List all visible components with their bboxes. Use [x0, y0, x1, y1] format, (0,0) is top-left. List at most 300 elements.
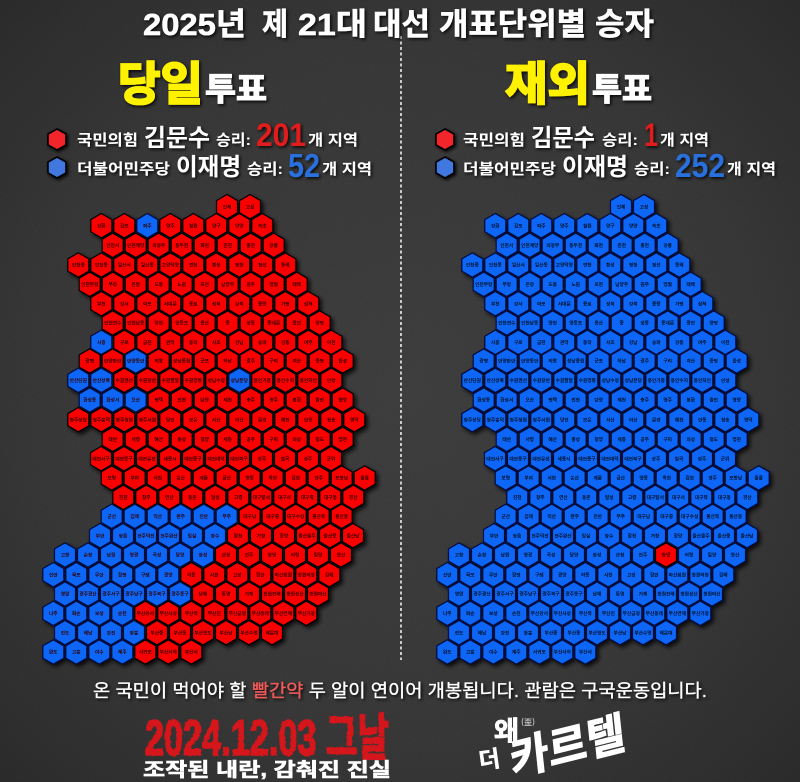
hex map: 당일투표: 칠곡: [281, 455, 290, 462]
hex map: 재외투표: 고령: [628, 494, 637, 500]
hex map: 당일투표: 해운대: [266, 629, 278, 636]
hex map: 당일투표: 연산: [165, 494, 174, 500]
hex map: 재외투표: 완주: [570, 513, 580, 520]
hex map: 재외투표: 동해: [675, 262, 684, 269]
hex map: 당일투표: 장성: [199, 552, 207, 558]
hex map: 당일투표: 함평: [118, 571, 127, 577]
hex map: 당일투표: 양양: [235, 222, 244, 228]
hex map: 재외투표: 포항남: [729, 475, 743, 481]
hex map: 재외투표: 양주: [560, 222, 569, 229]
hex map: 당일투표: 강북: [235, 300, 244, 307]
hex map: 당일투표: 대구동: [324, 494, 337, 501]
legend row: 김문수 201: 201: [256, 117, 306, 153]
hex map: 당일투표: 세종시: [164, 455, 176, 462]
hex map: 당일투표: 광주동구: [171, 591, 189, 598]
hex map: 재외투표: 영동: [639, 475, 649, 481]
hex map: 재외투표: 봉화: [686, 397, 696, 404]
hex map: 당일투표: 도봉: [154, 282, 164, 287]
hex map: 당일투표: 완주: [176, 513, 186, 520]
hex map: 재외투표: 마산회원: [669, 571, 686, 578]
hex map: 재외투표: 청도: [709, 436, 719, 442]
hex map: 재외투표: 평택: [548, 397, 557, 404]
hex map: 재외투표: 공주: [640, 437, 650, 443]
hex map: 당일투표: 부산중: [151, 629, 164, 636]
hex map: 재외투표: 고성: [627, 571, 636, 577]
hex map: 당일투표: 울산남: [347, 532, 360, 539]
hex map: 재외투표: 장흥: [524, 629, 533, 636]
hex map: 재외투표: 김해: [719, 571, 728, 578]
hex map: 당일투표: 구미: [269, 436, 278, 443]
hex map: 재외투표: 부산금정: [623, 610, 640, 617]
hex map: 재외투표: 동대문: [661, 320, 675, 327]
hex map: 당일투표: 울진: [315, 397, 324, 404]
hex map: 당일투표: 은평: [131, 281, 140, 287]
hex map: 재외투표: 중랑: [652, 300, 661, 306]
legend row: 이재명 252: 252: [675, 147, 725, 184]
hex map: 당일투표: 고흥: [72, 649, 81, 656]
hex map: 당일투표: 임실: [188, 532, 196, 538]
hex map: 재외투표: 양산: [731, 552, 740, 558]
hex map: 재외투표: 부평: [502, 281, 511, 288]
hex map: 재외투표: 부산동: [568, 629, 581, 636]
hex map: 당일투표: 홍천: [246, 242, 255, 249]
hex map: 당일투표: 대구수성: [287, 513, 304, 520]
hex map: 당일투표: 중랑: [258, 300, 267, 306]
hex map: 재외투표: 부산남: [614, 629, 627, 636]
hex map: 당일투표: 대전북구: [230, 455, 248, 462]
hex map: 재외투표: 인천연수: [498, 320, 516, 327]
hex map: 재외투표: 부산사하: [554, 649, 572, 656]
hex map: 당일투표: 수원팔달: [162, 377, 180, 384]
hex map: 당일투표: 동촌: [188, 494, 197, 500]
hex map: 재외투표: 김천: [685, 475, 694, 481]
icon: blue hexagon: [436, 157, 454, 178]
hex map: 재외투표: 수원영통: [579, 377, 597, 384]
hex map: 재외투표: 음성: [732, 358, 741, 364]
hex map: 당일투표: 보령: [107, 475, 116, 481]
hex map: 재외투표: 창녕: [662, 552, 670, 558]
hex map: 재외투표: 가평: [675, 300, 684, 307]
title: 승자: [595, 7, 654, 42]
hex map: 당일투표: 노원: [177, 281, 186, 287]
legend row: 김문수 1: 승리:: [602, 132, 638, 149]
hex map: 재외투표: 창원마산: [703, 591, 721, 598]
hex map: 당일투표: 안양동안: [127, 358, 145, 364]
hex map: 재외투표: 의정부: [546, 242, 560, 249]
hex map: 재외투표: 강릉: [663, 242, 673, 249]
hex map: 당일투표: 금산: [222, 475, 232, 481]
hex map: 재외투표: 함평: [512, 571, 521, 577]
hex map: 재외투표: 양구: [606, 222, 615, 229]
hex map: 재외투표: 장수: [605, 532, 614, 539]
legend row: 김문수 201: 국민의힘: [77, 132, 138, 149]
hex map: 재외투표: 진천: [513, 494, 522, 500]
hex map: 재외투표: 울산울주: [692, 532, 710, 539]
hex map: 당일투표: 논산: [176, 475, 186, 481]
title: 21대: [298, 7, 367, 42]
hex map: 당일투표: 계룡: [199, 475, 209, 482]
film subtitle: 조작된 내란, 감춰진 진실: [143, 759, 391, 781]
hex map: 당일투표: 고성: [233, 571, 242, 577]
legend row: 김문수 201: [77, 117, 358, 153]
legend row: 이재명 52: 더불어민주당: [77, 161, 170, 178]
hex map: 당일투표: 신안: [49, 571, 58, 577]
hex map: 재외투표: 청주서원: [533, 416, 550, 423]
hex map: 당일투표: 진안: [199, 513, 209, 519]
hex map: 당일투표: 송파: [258, 339, 267, 346]
hex map: 재외투표: 안산상록: [487, 377, 505, 384]
hex map: 재외투표: 산청: [616, 552, 624, 558]
hex map: 재외투표: 안성: [721, 377, 730, 383]
title: 2025년: [143, 7, 246, 42]
hex map: 재외투표: 강동: [675, 339, 684, 345]
hex map: 당일투표: 정읍: [119, 532, 128, 538]
hex map: 재외투표: 청주상당: [464, 416, 482, 423]
hex map: 당일투표: 성남중원: [173, 358, 190, 364]
hex map: 재외투표: 상주: [652, 455, 661, 462]
hex map: 재외투표: 화성서: [500, 397, 513, 404]
hex map: 당일투표: 고양덕양: [162, 262, 180, 269]
hex map: 당일투표: 양주: [166, 222, 175, 229]
hex map: 재외투표: 예산: [548, 436, 558, 443]
hex map: 재외투표: 성북: [606, 300, 615, 307]
hex map: 재외투표: 광양: [558, 571, 567, 577]
hex map: 당일투표: 공주: [246, 437, 256, 443]
hex map: 당일투표: 수원권선: [116, 377, 133, 384]
hex map: 재외투표: 영암: [455, 591, 464, 597]
film logo: 왜 더 카르텔: 더: [477, 745, 502, 774]
hex map: 재외투표: 부산동래: [646, 610, 663, 617]
hex map: 당일투표: 철원: [189, 222, 198, 228]
hex map: 당일투표: 서귀포: [139, 649, 152, 656]
hex map: 재외투표: 남해: [593, 591, 601, 598]
hex map: 당일투표: 광주북구: [148, 591, 166, 598]
hex map: 당일투표: 아산: [235, 416, 244, 423]
hex map: 재외투표: 부안: [490, 532, 499, 539]
hex map: 당일투표: 영덕: [350, 416, 359, 423]
hex map: 당일투표: 동두천: [175, 242, 188, 249]
hex map: 당일투표: 통영: [222, 591, 230, 597]
heading: 당일투표: [118, 58, 267, 110]
hex map: 재외투표: 보령: [501, 475, 510, 481]
hex map: 당일투표: 광주광산: [79, 591, 97, 598]
hex map: 당일투표: 성남수정: [208, 377, 225, 384]
hex map: 재외투표: 태안: [502, 436, 512, 443]
hex map: 재외투표: 보은: [583, 417, 592, 422]
hex map: 재외투표: 금천: [537, 339, 546, 345]
hex map: 재외투표: 거제: [639, 591, 647, 598]
hex map: 당일투표: 청송: [327, 416, 336, 422]
hex map: 재외투표: 강북: [629, 300, 638, 307]
title: 제: [262, 7, 288, 42]
icon: red hexagon: [436, 129, 454, 150]
hex map: 당일투표: 시흥: [97, 339, 106, 346]
hex map: 재외투표: 홍성: [571, 436, 580, 443]
hex map: 당일투표: 청주청원: [116, 416, 133, 423]
hex map: 재외투표: 삼척: [698, 300, 707, 307]
hex map: 당일투표: 산청: [222, 552, 230, 558]
hex map: 재외투표: 대구중: [660, 513, 674, 520]
hex map: 재외투표: 인제: [617, 203, 625, 210]
hex map: 재외투표: 곡성: [547, 552, 555, 559]
hex map: 당일투표: 부산북: [185, 610, 198, 617]
film logo: 왜 더 카르텔: (歪): [521, 717, 535, 728]
hex map: 당일투표: 영동: [245, 475, 255, 481]
hex map: 당일투표: 괴산: [292, 358, 302, 365]
hex map: 재외투표: 이천: [721, 339, 730, 346]
hex map: 당일투표: 인천중: [72, 262, 85, 268]
hex map: 재외투표: 의성: [686, 436, 695, 443]
hex map: 당일투표: 청주서원: [139, 416, 156, 423]
hex map: 당일투표: 진천: [177, 397, 186, 403]
hex map: 당일투표: 충주: [246, 397, 256, 404]
hex map: 당일투표: 태백: [292, 281, 301, 288]
hex map: 당일투표: 문경: [258, 416, 267, 422]
legend row: 김문수 201: 개 지역: [308, 132, 358, 149]
hex map: 당일투표: 진천: [119, 494, 128, 500]
hex map: 재외투표: 칠곡: [675, 455, 684, 462]
hex map: 당일투표: 이천: [327, 339, 336, 346]
hex map: 재외투표: 수원권선: [510, 377, 527, 384]
hex map: 재외투표: 대구북: [695, 494, 708, 501]
heading: 재외투표: 투표: [592, 71, 652, 107]
hex map: 당일투표: 부산기장: [298, 610, 316, 617]
hex map: 당일투표: 영암: [61, 591, 70, 597]
hex map: 재외투표: 부산북: [579, 610, 592, 617]
hex map: 재외투표: 제주: [512, 649, 521, 656]
hex map: 당일투표: 경주: [314, 475, 324, 482]
hex map: 당일투표: 고창: [61, 552, 70, 558]
hex map: 재외투표: 신안: [443, 571, 452, 577]
hex map: 당일투표: 안산상록: [93, 377, 111, 384]
hex map: 당일투표: 대구중: [266, 513, 280, 520]
hex map: 당일투표: 남양주: [221, 281, 235, 288]
hex map: 재외투표: 진천: [571, 397, 580, 403]
hex map: 당일투표: 인천연수: [104, 320, 122, 327]
hex map: 당일투표: 대전중구: [184, 455, 202, 462]
hex map: 재외투표: 남양주: [615, 281, 629, 288]
legend row: 이재명 52: 개 지역: [322, 161, 372, 178]
hex map: 당일투표: 남해: [199, 591, 207, 598]
hex map: 당일투표: 의령: [291, 552, 299, 559]
hex map: 재외투표: 용인수지: [671, 377, 688, 384]
hex map: 당일투표: 춘천: [223, 242, 232, 248]
hex map: 재외투표: 서귀포: [533, 649, 546, 656]
hex map: 당일투표: [43, 194, 375, 664]
hex map: 당일투표: 양구: [212, 222, 221, 229]
hex map: 당일투표: 영양: [338, 397, 348, 403]
hex map: 당일투표: 강릉: [269, 242, 279, 249]
hex map: 당일투표: 세종: [223, 436, 233, 443]
hex map: 재외투표: 파주: [537, 222, 546, 229]
hex map: 당일투표: 가평: [281, 300, 290, 307]
hex map: 재외투표: 마포: [537, 300, 546, 307]
legend row: 김문수 1: 개 지역: [660, 132, 709, 149]
hex map: 당일투표: 화천: [200, 242, 209, 249]
hex map: 당일투표: 대구북: [301, 494, 314, 501]
legend row: 이재명 52: 52: [288, 147, 320, 184]
hex map: 재외투표: 충주: [640, 397, 650, 404]
hex map: 재외투표: 여수: [489, 649, 498, 656]
legend row: 김문수 201: 김문수: [144, 125, 210, 152]
hex map: 재외투표: 울산동: [729, 513, 743, 520]
hex map: 당일투표: 창원마산: [309, 591, 327, 598]
hex map: 재외투표: 울릉: [754, 475, 764, 482]
hex map: 당일투표: 양산: [337, 552, 346, 558]
hex map: 당일투표: 수원영통: [185, 377, 203, 384]
hex map: 재외투표: 성남분당: [625, 377, 643, 383]
hex map: 재외투표: 강화: [491, 222, 500, 229]
hex map: 당일투표: 서대문: [164, 300, 177, 307]
hex map: 당일투표: 사천: [210, 571, 219, 578]
hex map: 당일투표: 의왕: [154, 358, 164, 365]
hex map: 당일투표: 수원장안: [139, 377, 157, 384]
hex map: 재외투표: 수원팔달: [556, 377, 574, 384]
hex map: 당일투표: 강남: [235, 339, 244, 345]
hex map: 당일투표: 오산: [131, 397, 141, 403]
hex map: 재외투표: 인천중: [466, 262, 479, 268]
hex map: 재외투표: 안양만안: [498, 358, 516, 364]
hex map: 당일투표: 제천: [223, 397, 232, 404]
legend row: 이재명 52: 이재명: [176, 154, 241, 181]
hex map: 당일투표: 횡성: [212, 262, 221, 268]
hex map: 재외투표: 고성: [640, 203, 648, 209]
hex map: 당일투표: 동작: [189, 339, 198, 346]
hex map: 재외투표: 울산중: [718, 532, 731, 539]
hex map: 재외투표: 고창: [455, 552, 464, 558]
hex map: 당일투표: 대전유성: [138, 455, 156, 462]
hex map: 재외투표: 구미: [663, 436, 672, 443]
hex map: 재외투표: 고양덕양: [556, 262, 574, 269]
legend row: 이재명 52: 승리:: [247, 161, 283, 178]
hex map: 재외투표: 함양: [674, 532, 683, 538]
hex map: 재외투표: 하동: [581, 571, 590, 578]
hex map: 재외투표: 구례: [535, 571, 544, 578]
hex map: 당일투표: 대전동구: [115, 455, 133, 462]
hex map: 재외투표: 장성: [593, 552, 601, 558]
hex map: 재외투표: 경주: [708, 475, 718, 482]
hex map: 당일투표: 거창: [257, 532, 266, 539]
hex map: 당일투표: 화성서: [106, 397, 119, 404]
hex map: 재외투표: 창원성산: [680, 591, 698, 597]
hex map: 당일투표: 보은: [189, 417, 198, 422]
hex map: 당일투표: 광명: [85, 358, 94, 364]
hex map: 당일투표: 영월: [269, 281, 278, 288]
hex map: 재외투표: 무주: [616, 514, 626, 520]
hex map: 재외투표: 영등포: [569, 320, 583, 326]
hex map: 재외투표: 남원: [501, 552, 509, 558]
hex map: 재외투표: 부산영도: [588, 629, 606, 636]
hex map: 재외투표: 함안: [650, 571, 659, 577]
hex map: 재외투표: 구리: [663, 358, 672, 365]
hex map: 재외투표: 완도: [443, 649, 452, 655]
hex map: 당일투표: 인천부평: [81, 281, 98, 288]
hex map: 재외투표: 정선: [652, 262, 661, 268]
hex map: 당일투표: 밀양: [314, 552, 323, 558]
hex map: 당일투표: 강서: [120, 300, 129, 307]
hex map: 당일투표: 평택: [154, 397, 163, 404]
hex map: 당일투표: 서초: [212, 339, 221, 346]
hex map: 재외투표: 세종: [617, 436, 627, 443]
legend row: 이재명 252: 더불어민주당: [463, 161, 556, 178]
hex map: 재외투표: 광진: [686, 320, 695, 326]
hex map: 당일투표: 안산단원: [70, 377, 87, 383]
hex map: 재외투표: 연산: [559, 494, 568, 500]
hex map: 재외투표: 김제: [524, 513, 533, 520]
legend row: 이재명 252: 승리:: [634, 161, 670, 178]
hex map: 재외투표: 부산서: [579, 649, 592, 656]
legend: left panel: [48, 117, 372, 184]
hex map: 당일투표: 부산동: [174, 629, 187, 636]
hex map: 재외투표: 성주: [698, 455, 707, 462]
hex map: 재외투표: 광주: [640, 358, 650, 365]
hex map: 당일투표: 무안: [95, 571, 104, 578]
hex map: 재외투표: 서초: [606, 339, 615, 346]
hex map: 재외투표: 양천: [548, 320, 557, 326]
hex map: 당일투표: 장흥: [130, 629, 139, 636]
hex map: 재외투표: 성동: [640, 320, 650, 326]
hex map: 재외투표: 성남중원: [567, 358, 584, 364]
hex map: 재외투표: 오산: [525, 397, 535, 403]
hex map: 당일투표: 부산남: [220, 629, 233, 636]
hex map: 재외투표: 원주: [640, 281, 650, 288]
hex map: 당일투표: 안성: [327, 377, 336, 383]
hex map: 당일투표: 인제: [223, 203, 231, 210]
hex map: 당일투표: 강화: [97, 222, 106, 229]
hex map: 당일투표: 청도: [315, 436, 325, 442]
hex map: 재외투표: 인천남동: [521, 320, 539, 326]
hex map: 당일투표: 부산수영: [240, 629, 258, 636]
hex map: 재외투표: 영천: [732, 436, 741, 442]
hex map: 재외투표: 양평: [709, 320, 718, 326]
hex map: 재외투표: 화성동: [477, 397, 491, 404]
hex map: 재외투표: 대전대덕: [601, 455, 619, 462]
legend row: 김문수 201: 승리:: [216, 132, 251, 149]
hex map: 당일투표: 구례: [141, 571, 150, 578]
hex map: 재외투표: 청송: [721, 416, 730, 422]
hex map: 재외투표: 영광: [524, 552, 533, 558]
hex map: 재외투표: 군포: [594, 359, 604, 364]
hex map: 당일투표: 고령: [234, 494, 243, 500]
hex map: 당일투표: 홍성: [177, 436, 186, 443]
hex map: 당일투표: 강동: [281, 339, 290, 345]
hex map: 당일투표: 인천계양: [127, 242, 145, 249]
hex map: 재외투표: 부천: [491, 300, 500, 307]
hex map: 재외투표: 광명: [479, 358, 488, 364]
hex map: 재외투표: 은평: [525, 281, 534, 287]
hex map: 재외투표: 대전동구: [509, 455, 527, 462]
legend: right panel: [436, 117, 776, 184]
hex map: 당일투표: 양천: [154, 320, 163, 326]
hex map: 당일투표: 성남분당: [231, 377, 249, 383]
hex map: 당일투표: 동대문: [267, 320, 281, 327]
hex map: 재외투표: 인천동: [489, 262, 502, 268]
hex map: 당일투표: 청주: [142, 494, 151, 501]
hex map: 당일투표: 포항남: [335, 475, 349, 481]
hex map: 재외투표: 대전중구: [578, 455, 596, 462]
hex map: 재외투표: 안동: [698, 416, 707, 422]
hex map: 당일투표: 금천: [143, 339, 152, 345]
hex map: 당일투표: 옥천: [268, 475, 277, 482]
hex map: 당일투표: 청주상당: [70, 416, 88, 423]
hex map: 재외투표: 도봉: [548, 282, 558, 287]
hex map: 당일투표: 서령: [131, 436, 140, 443]
hex map: 재외투표: 동작: [583, 339, 592, 346]
hex map: 당일투표: 함안: [256, 571, 265, 577]
heading: 재외투표: 재외: [505, 58, 590, 110]
hex map: 재외투표: 보성: [489, 610, 498, 616]
hex map: 재외투표: 홍천: [640, 242, 649, 249]
